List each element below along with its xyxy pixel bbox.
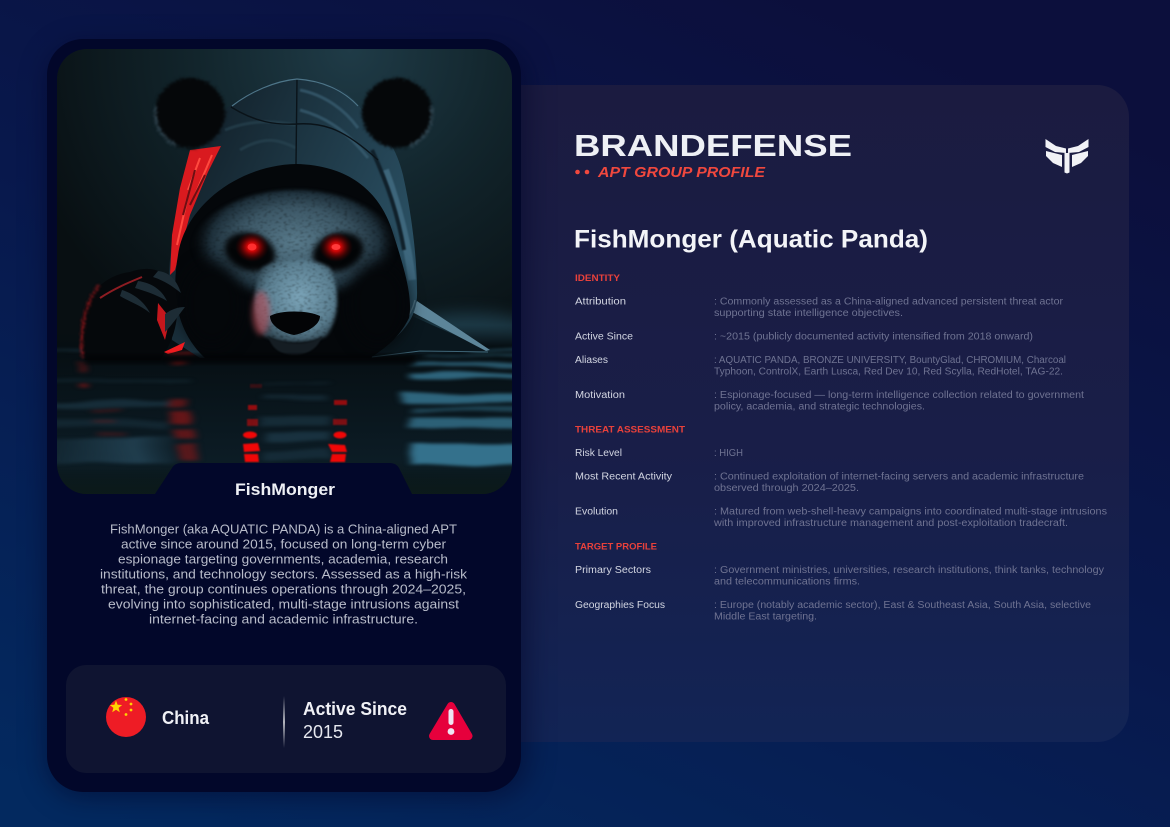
horizon glow [414,306,512,343]
hood [168,78,417,358]
description: institutions, and technology sectors. Assessed as a high-risk [100,567,468,582]
cheeks [182,263,242,347]
section: identity: Motivation [575,390,625,401]
section: threat assessment: Most Recent Activity [575,472,672,482]
name: FishMonger [235,481,336,499]
country: China [162,708,210,728]
description [100,521,468,627]
right ear [362,78,432,148]
water [57,328,512,478]
eyes [235,232,353,262]
description: espionage targeting governments, academia, research [118,552,448,566]
section: threat assessment: THREAT ASSESSMENT [575,424,685,436]
section: target profile: TARGET PROFILE [575,542,657,552]
section: identity: : ~2015 (publicly documented activity intensified from 2018 onward) [714,332,1033,342]
section: target profile [575,542,1104,622]
section: threat assessment: : Continued exploitation of internet-facing servers and academic infrastructure [714,472,1084,482]
section: identity: : Espionage-focused — long-term intelligence collection related to government [714,390,1084,401]
panel: profile details [470,85,1129,742]
left red reflection [81,352,196,458]
nose [270,312,320,335]
active since: Active Since [303,699,407,719]
active since [303,699,407,742]
card shadow [47,45,527,797]
stat box [66,665,506,773]
illustration: hooded panda in water [50,49,540,494]
paw [81,269,185,360]
hood red highlight [170,146,221,275]
section: identity: : AQUATIC PANDA, BRONZE UNIVERSITY, BountyGlad, CHROMIUM, Charcoal [714,355,1066,366]
water line [85,355,415,363]
water ripples [50,349,522,465]
section: threat assessment [575,424,1107,529]
section: threat assessment: Risk Level [575,448,622,459]
section: threat assessment: with improved infrastructure management and post-exploitation tradecraft. [713,518,1068,529]
active since: 2015 [303,722,343,742]
muzzle [255,260,337,342]
section: identity: Active Since [575,332,633,342]
left ear [155,78,225,148]
section: threat assessment: Evolution [575,506,618,518]
section: threat assessment: : HIGH [714,448,743,459]
icon: China flag [106,697,146,737]
hood folds [225,90,412,280]
eye patches [222,228,280,275]
section: identity: IDENTITY [575,273,621,284]
face [175,164,410,358]
shoulder [370,301,490,358]
description: threat, the group continues operations through 2024–2025, [101,582,466,597]
name tab [155,463,412,510]
section: target profile: : Europe (notably academic sector), East & Southeast Asia, South Asia, selective [714,600,1091,611]
section: identity [575,273,1084,412]
subtitle: APT group profile: APT GROUP PROFILE [597,164,766,181]
section: identity: supporting state intelligence objectives. [714,308,903,319]
section: identity: Typhoon, ControlX, Earth Lusca, Red Dev 10, Red Scylla, RedHotel, TAG-22. [714,366,1063,378]
panel: group card [47,39,540,792]
icon: warning triangle [433,706,468,736]
reflection core [258,394,332,461]
section: threat assessment: : Matured from web-shell-heavy campaigns into coordinated multi-stage intrusions [714,506,1107,518]
red eye reflection [243,384,347,462]
section: target profile: and telecommunications firms. [714,576,860,588]
section: identity: : Commonly assessed as a China-aligned advanced persistent threat actor [714,296,1064,308]
section: target profile: Middle East targeting. [714,612,817,622]
section: threat assessment: observed through 2024–2025. [714,483,859,494]
section: identity: policy, academia, and strategic technologies. [714,402,925,412]
section: target profile: Geographies Focus [575,600,665,611]
section: target profile: : Government ministries, universities, research institutions, think tanks, technology [714,565,1104,576]
section: identity: Aliases [575,355,608,366]
section: target profile: Primary Sectors [575,565,651,576]
description: internet-facing and academic infrastructure. [149,612,418,627]
hood seams [231,79,378,164]
section: identity: Attribution [575,296,626,308]
description: active since around 2015, focused on long-term cyber [121,536,447,551]
description: evolving into sophisticated, multi-stage intrusions against [108,597,459,612]
logo: BRANDEFENSE wordmark: BRANDEFENSE [574,128,852,163]
description: FishMonger (aka AQUATIC PANDA) is a China-aligned APT [110,521,457,536]
heading: group name: FishMonger (Aquatic Panda) [574,226,928,254]
chin [268,336,322,355]
icon: brand shield logo [1046,139,1088,174]
